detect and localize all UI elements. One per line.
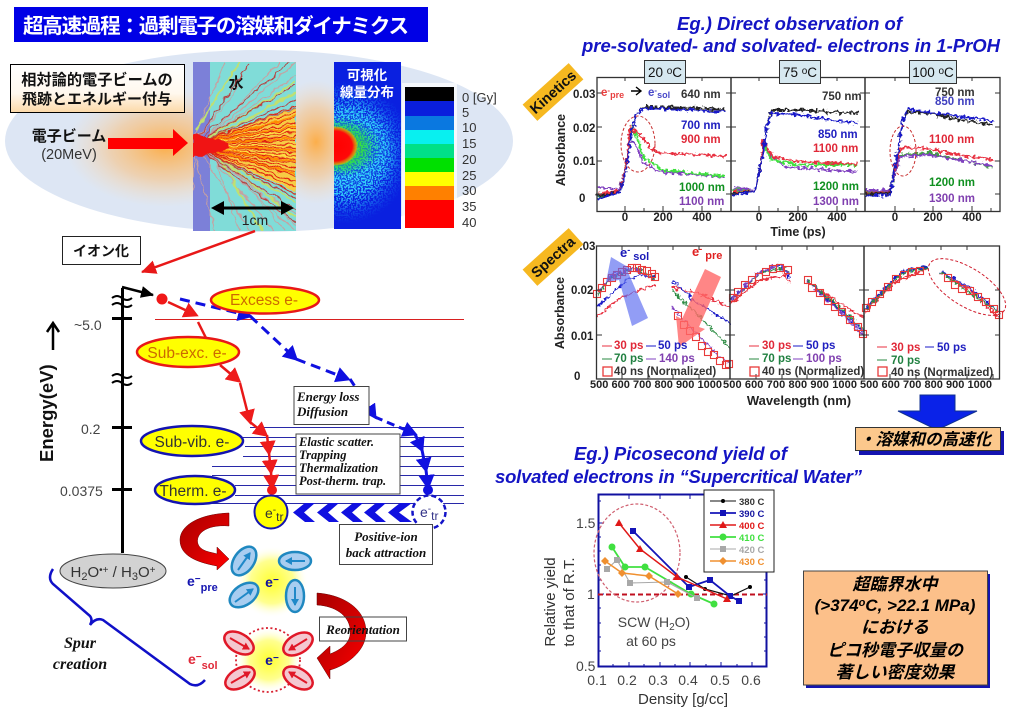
water dipoles xyxy=(220,627,317,694)
blue shift arrow xyxy=(606,257,648,326)
y axis xyxy=(553,241,595,383)
colour scale: 5 xyxy=(462,105,469,120)
y axis: Absorbance xyxy=(553,277,567,349)
brace: spur creation xyxy=(50,569,205,685)
trapped electron solid: - xyxy=(273,505,276,516)
x axis: 200 xyxy=(653,212,673,224)
legend 20C xyxy=(602,340,716,378)
x axis: 0 xyxy=(756,212,762,224)
temperature labels xyxy=(644,60,956,84)
temperature labels: o xyxy=(802,66,808,77)
chart annotation: 2 xyxy=(669,622,675,633)
y axis labels: to that of R.T. xyxy=(561,557,578,647)
trapped electron dashed: - xyxy=(428,504,431,515)
legend 75C: 100 ps xyxy=(806,353,842,365)
trapped electron solid: tr xyxy=(276,510,283,524)
panel: energy diagram xyxy=(36,286,464,694)
colour scale: 20 xyxy=(462,152,476,167)
temperature labels: 20 xyxy=(648,65,663,80)
legend: 390 C xyxy=(739,509,764,520)
scale bar 1cm xyxy=(211,201,294,228)
label: energy loss: Energy loss xyxy=(296,389,359,404)
spectrum labels: e xyxy=(692,244,699,259)
spectrum labels: - xyxy=(627,245,630,255)
label: energy loss: Diffusion xyxy=(296,404,348,419)
callout: faster solvation xyxy=(856,428,1004,455)
state: sub-excitation electron: Sub-exc. e- xyxy=(147,345,227,362)
temperature labels: C xyxy=(944,65,954,80)
heading: picosecond yield xyxy=(495,443,863,487)
title xyxy=(14,7,428,42)
arrow: electron beam xyxy=(108,129,188,156)
ellipse: parent ions: / H xyxy=(108,564,132,581)
colour scale: 40 xyxy=(462,215,476,230)
heading: direct observation: pre-solvated- and solvated- electrons in 1-PrOH xyxy=(581,35,1001,56)
blue dashed path xyxy=(180,299,433,495)
tag: spectra xyxy=(523,228,583,286)
tag: spectra: Spectra xyxy=(529,233,579,281)
text box: relativistic electron beam xyxy=(10,64,184,112)
orange glow xyxy=(74,85,334,202)
40 ns square markers xyxy=(595,268,1001,365)
y axis: 0.03 xyxy=(573,241,595,253)
pre-solvated electron cluster: e xyxy=(265,574,273,590)
curved arrow to solvated (reorientation) xyxy=(317,593,366,679)
panel: kinetics charts xyxy=(523,60,1000,239)
y axis labels: 0.5 xyxy=(576,658,596,674)
curves xyxy=(597,107,993,199)
legend 20C: 140 ps xyxy=(659,353,695,365)
label: reorientation: Reorientation xyxy=(325,622,400,637)
trapped electron dashed: e xyxy=(420,504,428,520)
e-pre to e-sol annotation: e xyxy=(648,87,654,99)
heading: picosecond yield: Eg.) Picosecond yield of xyxy=(574,443,789,464)
ellipse: parent ions: 2 xyxy=(81,571,87,583)
energy axis xyxy=(112,287,153,553)
spectrum labels: e xyxy=(620,245,627,260)
dashed highlight ellipse xyxy=(920,248,1014,326)
legend 75C: 70 ps xyxy=(762,353,791,365)
axis value labels: ~5.0 xyxy=(74,317,102,333)
e-pre to e-sol annotation: - xyxy=(607,86,610,95)
y axis labels: 1 xyxy=(587,586,595,602)
colour scale: 10 xyxy=(462,120,476,135)
series 390 C xyxy=(630,528,742,604)
label: positive-ion back attraction: Positive-ion xyxy=(354,529,418,544)
wavelength labels: 1100 nm xyxy=(813,143,858,155)
legend 20C: 30 ps xyxy=(614,340,643,352)
x axis: Time (ps) xyxy=(770,225,826,239)
pre-solvated electron cluster xyxy=(225,542,311,618)
x axis: 200 xyxy=(923,212,943,224)
curved arrow to pre-solvated xyxy=(180,513,229,570)
dashed highlight circle xyxy=(594,504,680,602)
legend 75C: 50 ps xyxy=(806,340,835,352)
label: pre-solvated electron: − xyxy=(195,574,201,585)
water target with tracks: 水 xyxy=(228,75,244,92)
text box: relativistic electron beam: 相対論的電子ビームの xyxy=(21,71,173,89)
text box: relativistic electron beam: 飛跡とエネルギー付与 xyxy=(22,90,172,108)
colour scale: 25 xyxy=(462,168,476,183)
state: sub-excitation electron xyxy=(137,337,239,367)
label: elastic scatter and trapping: Post-therm. trap. xyxy=(299,474,386,488)
series 430 C xyxy=(601,557,682,598)
legend 75C xyxy=(749,340,864,378)
panel: spectra charts xyxy=(523,228,1014,408)
e-pre to e-sol annotation xyxy=(601,86,670,100)
legend: 420 C xyxy=(739,545,764,556)
state: thermal electron xyxy=(155,476,235,504)
water dipoles xyxy=(225,542,311,612)
y axis labels: 1.5 xyxy=(576,515,596,531)
colour scale: 15 xyxy=(462,136,476,151)
label: energy loss xyxy=(294,386,369,424)
wavelength labels: 1100 nm xyxy=(679,196,724,208)
label: electron beam: 電子ビーム xyxy=(32,127,106,145)
y axis: 0.02 xyxy=(573,123,595,135)
label: reorientation xyxy=(320,617,406,641)
y axis labels: Relative yield xyxy=(542,557,559,647)
label: spur creation: Spur xyxy=(64,635,97,652)
heading: direct observation xyxy=(581,13,1001,56)
legend 20C: 50 ps xyxy=(658,340,687,352)
legend xyxy=(704,490,774,572)
label: pre-solvated electron: pre xyxy=(201,582,218,594)
chart annotation: at 60 ps xyxy=(626,633,676,649)
arrow: conclusion down xyxy=(898,395,977,430)
wavelength labels: 1000 nm xyxy=(679,182,725,194)
state: excess electron: Excess e- xyxy=(230,292,298,309)
x axis labels: 0.6 xyxy=(741,672,761,688)
red relaxation path xyxy=(156,294,277,495)
label: solvated electron: − xyxy=(196,652,202,663)
callout: density effect in supercritical water: 著しい密度効果 xyxy=(836,663,955,682)
curves xyxy=(597,264,999,363)
wavelength labels: 640 nm xyxy=(681,89,721,101)
wavelength labels: 700 nm xyxy=(681,120,721,132)
axis title xyxy=(36,323,59,462)
arrow: beam to ionization xyxy=(142,231,255,272)
e-pre to e-sol annotation: - xyxy=(654,86,657,95)
wavelength labels: 1200 nm xyxy=(929,177,975,189)
dashed highlight ellipses xyxy=(621,116,916,176)
water target with tracks xyxy=(192,62,296,231)
x axis labels: 0.4 xyxy=(678,672,698,688)
ellipse: parent ions xyxy=(60,554,166,588)
x axis labels: 0.2 xyxy=(617,672,637,688)
y axis: 0.02 xyxy=(571,285,593,297)
legend 20C: 70 ps xyxy=(614,353,643,365)
x axis: 400 xyxy=(827,212,847,224)
x axis: 0 xyxy=(892,212,898,224)
x axis: 400 xyxy=(962,212,982,224)
wavelength labels: 850 nm xyxy=(935,96,975,108)
x axis labels: Density [g/cc] xyxy=(638,691,728,708)
callout: density effect in supercritical water: o xyxy=(859,597,866,609)
chevron arrow: positive-ion back attraction xyxy=(293,503,412,522)
label: spur creation xyxy=(53,635,107,673)
x axis: 500 600 700 800 900 1000 xyxy=(860,379,992,391)
legend 100C: 30 ps xyxy=(891,342,920,354)
x axis: 400 xyxy=(692,212,712,224)
background ellipse xyxy=(5,50,513,232)
red decay arrow xyxy=(676,269,721,347)
axis value labels: 0.2 xyxy=(81,421,101,437)
spectrum labels: pre xyxy=(702,250,722,262)
legend 75C: 30 ps xyxy=(762,340,791,352)
label: pre-solvated electron: e xyxy=(187,573,195,589)
energy level lines xyxy=(155,320,464,504)
legend 100C xyxy=(877,342,993,379)
state: thermal electron: Therm. e- xyxy=(159,483,227,500)
frames and ticks xyxy=(597,77,1000,212)
title: 超高速過程：過剰電子の溶媒和ダイナミクス xyxy=(23,14,409,38)
heading: picosecond yield: solvated electrons in “Supercritical Water” xyxy=(495,466,863,487)
series 380 C xyxy=(684,575,752,598)
x axis labels: 0.1 xyxy=(587,672,607,688)
label: positive-ion back attraction xyxy=(340,524,432,564)
state: sub-vibrational electron xyxy=(141,426,243,456)
y axis: Absorbance xyxy=(554,114,568,186)
spectrum labels: - xyxy=(699,244,702,254)
ellipse: parent ions: •+ xyxy=(99,565,109,576)
scale bar 1cm: 1cm xyxy=(242,212,268,228)
label: electron beam xyxy=(32,127,106,163)
trapped electron solid: e xyxy=(265,505,273,521)
ellipse: parent ions: O xyxy=(138,564,150,581)
callout: faster solvation: ・溶媒和の高速化 xyxy=(859,430,992,449)
pre-solvated electron cluster: − xyxy=(273,575,279,586)
series 420 C xyxy=(604,557,700,601)
legend: 400 C xyxy=(739,521,764,532)
legend: 410 C xyxy=(739,533,764,544)
x axis labels xyxy=(587,672,761,708)
trapped electron dashed: tr xyxy=(431,509,438,523)
x axis: 0 xyxy=(622,212,628,224)
chart annotation: O) xyxy=(675,614,690,630)
ellipse: parent ions: O xyxy=(87,564,99,581)
state: excess electron xyxy=(211,286,319,314)
callout: density effect in supercritical water: (>374 xyxy=(815,596,859,615)
x axis: 500 600 700 800 900 1000 xyxy=(590,379,722,391)
y axis: 0.03 xyxy=(573,89,595,101)
wavelength labels: 1200 nm xyxy=(813,181,859,193)
legend 100C: 50 ps xyxy=(937,342,966,354)
wavelength labels: 1300 nm xyxy=(813,196,859,208)
state: sub-vibrational electron: Sub-vib. e- xyxy=(155,434,229,451)
callout: density effect in supercritical water xyxy=(804,571,990,688)
frame and ticks xyxy=(598,494,767,667)
y axis: 0.01 xyxy=(571,331,594,343)
x axis: Wavelength (nm) xyxy=(747,393,851,408)
colour scale: 0 [Gy] xyxy=(462,90,497,105)
x axis xyxy=(622,212,982,239)
solvated electron cluster: e xyxy=(265,652,273,668)
wavelength labels: 900 nm xyxy=(681,134,721,146)
label: electron beam: (20MeV) xyxy=(41,147,97,163)
x axis: 200 xyxy=(788,212,808,224)
wavelength labels: 1300 nm xyxy=(929,193,975,205)
trapped electron solid xyxy=(254,496,288,528)
wavelength labels: 750 nm xyxy=(935,87,975,99)
wavelength labels: 1100 nm xyxy=(929,134,974,146)
temperature labels: C xyxy=(672,65,682,80)
solvated electron cluster: − xyxy=(273,653,279,664)
solvated electron cluster xyxy=(220,627,317,694)
box: ionization xyxy=(62,236,140,264)
spectrum labels: sol xyxy=(630,251,649,263)
label: elastic scatter and trapping: Trapping xyxy=(299,448,346,462)
dose map xyxy=(334,62,401,229)
frames and ticks xyxy=(596,246,1000,379)
y axis: 0 xyxy=(574,371,580,383)
dose map: 可視化 xyxy=(347,67,388,83)
legend 20C: 40 ns (Normalized) xyxy=(614,366,716,378)
legend: 380 C xyxy=(739,497,764,508)
temperature labels: o xyxy=(667,66,673,77)
spectrum labels xyxy=(620,244,722,263)
y axis labels xyxy=(542,515,596,674)
temperature labels: 100 xyxy=(912,65,935,80)
y axis: 0.01 xyxy=(573,156,596,168)
callout: density effect in supercritical water: C, >22.1 MPa) xyxy=(865,596,976,615)
chart annotation: SCW (H xyxy=(618,614,669,630)
label: positive-ion back attraction: back attraction xyxy=(346,545,426,560)
tag: kinetics: Kinetics xyxy=(527,68,580,118)
wavelength labels: 750 nm xyxy=(822,91,862,103)
wavelength labels: 850 nm xyxy=(818,129,858,141)
e-pre to e-sol annotation: pre xyxy=(610,90,624,100)
y axis xyxy=(554,89,596,205)
series 400 C xyxy=(615,519,731,602)
label: spur creation: creation xyxy=(53,656,107,673)
panel: yield chart xyxy=(542,490,774,708)
series 410 C xyxy=(608,544,718,608)
ellipse: parent ions: H xyxy=(71,564,81,581)
legend 100C: 70 ps xyxy=(891,355,920,367)
axis value labels xyxy=(60,317,103,499)
label: solvated electron: sol xyxy=(202,660,218,672)
callout: density effect in supercritical water: ピコ秒電子収量の xyxy=(827,641,965,660)
heading: direct observation: Eg.) Direct observation of xyxy=(677,13,904,34)
trapped electron dashed xyxy=(412,496,446,528)
legend 75C: 40 ns (Normalized) xyxy=(762,366,864,378)
x axis labels: 0.5 xyxy=(710,672,730,688)
callout: density effect in supercritical water: における xyxy=(861,618,929,637)
panel: electron beam simulation xyxy=(5,50,513,232)
reference line at 1 xyxy=(598,594,767,596)
colour scale xyxy=(402,83,497,232)
label: solvated electron: e xyxy=(188,651,196,667)
colour scale: 35 xyxy=(462,199,476,214)
dose map: 線量分布 xyxy=(340,84,394,100)
y axis: 0 xyxy=(579,193,585,205)
x axis labels: 0.3 xyxy=(648,672,668,688)
callout: density effect in supercritical water: 超臨界水中 xyxy=(852,575,939,594)
label: elastic scatter and trapping xyxy=(296,434,400,494)
ellipse: parent ions: 3 xyxy=(132,571,138,583)
e-pre to e-sol annotation: e xyxy=(601,87,607,99)
legend 100C: 40 ns (Normalized) xyxy=(891,367,993,379)
legend: 430 C xyxy=(739,557,764,568)
axis title: Energy(eV) xyxy=(36,364,57,462)
temperature labels: C xyxy=(807,65,817,80)
x axis xyxy=(590,379,992,408)
temperature labels: o xyxy=(938,66,944,77)
label: elastic scatter and trapping: Thermalization xyxy=(299,461,378,475)
e-pre to e-sol annotation: sol xyxy=(657,90,670,100)
axis value labels: 0.0375 xyxy=(60,483,103,499)
temperature labels: 75 xyxy=(783,65,798,80)
colour scale: 30 xyxy=(462,183,476,198)
label: elastic scatter and trapping: Elastic scatter. xyxy=(298,435,374,449)
ellipse: parent ions: + xyxy=(150,565,156,576)
wavelength labels xyxy=(679,87,975,208)
box: ionization: イオン化 xyxy=(73,243,129,259)
x axis: 500 600 700 800 900 1000 xyxy=(723,379,857,391)
chart annotation xyxy=(618,614,690,649)
